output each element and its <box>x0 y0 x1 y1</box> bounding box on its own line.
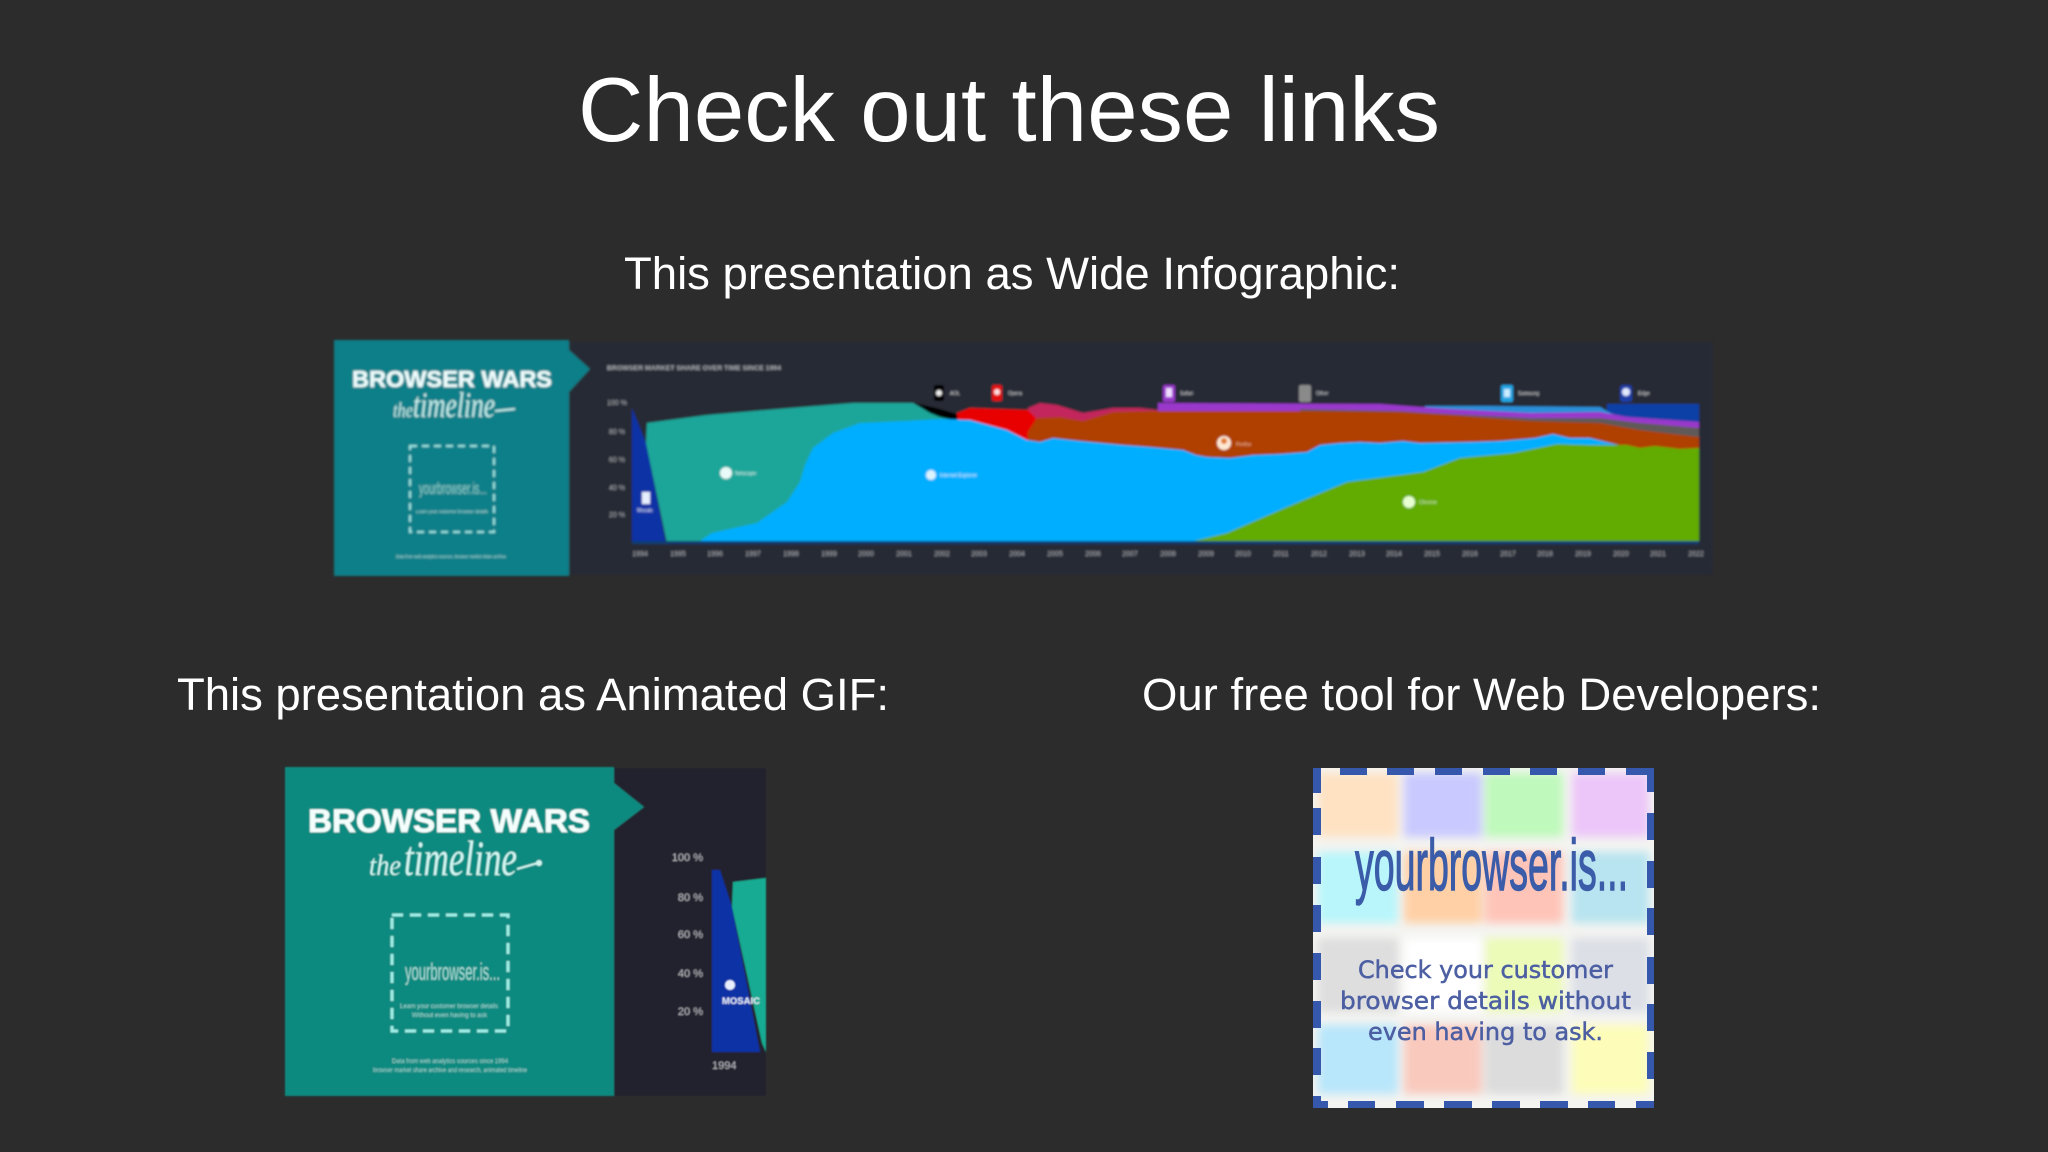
marker: chrome: Chrome <box>1419 500 1437 506</box>
area: internet explorer <box>697 419 1627 543</box>
wide x axis labels <box>632 551 1704 558</box>
area: opera red <box>957 408 1036 543</box>
wide chart heading: BROWSER MARKET SHARE OVER TIME SINCE 1994 <box>607 365 781 372</box>
area: mosaic <box>632 408 666 543</box>
gif title: BROWSER WARS <box>308 803 590 839</box>
wide x axis labels: 2009 <box>1198 551 1214 558</box>
wide dashed promo box <box>410 446 494 532</box>
wide footer note: Data from web analytics sources, browser market share archive <box>396 554 506 559</box>
area: chrome <box>1186 444 1699 543</box>
gif footer note: Data from web analytics sources since 1994 <box>392 1059 509 1065</box>
wide subtitle: the <box>393 398 413 422</box>
gif chart background <box>614 768 766 1096</box>
gif y axis labels: 20 % <box>678 1006 703 1018</box>
wide x axis labels: 2004 <box>1009 551 1025 558</box>
tool description: browser details without <box>1340 987 1631 1015</box>
wide x axis labels: 2017 <box>1500 551 1516 558</box>
wide x axis labels: 2002 <box>934 551 950 558</box>
title: Check out these links <box>578 60 1440 161</box>
wide y axis labels: 80 % <box>609 429 625 436</box>
wide x axis labels: 2013 <box>1349 551 1365 558</box>
chart background <box>569 342 1713 575</box>
gif subtitle: timeline <box>404 830 517 886</box>
marker: samsung <box>1501 385 1539 402</box>
gif y axis labels: 100 % <box>672 852 703 864</box>
wide x axis labels: 2008 <box>1160 551 1176 558</box>
marker: samsung: Samsung <box>1518 391 1539 397</box>
wide x axis labels: 1995 <box>670 551 686 558</box>
wide x axis labels: 2021 <box>1650 551 1666 558</box>
chart baseline <box>632 541 1699 544</box>
area: safari <box>1158 403 1699 543</box>
marker: edge: Edge <box>1638 391 1650 397</box>
marker: firefox: Firefox <box>1236 442 1252 448</box>
wide x axis labels: 2010 <box>1235 551 1251 558</box>
marker: internet explorer: Internet Explorer <box>940 473 977 479</box>
gif teal title panel <box>285 767 644 1096</box>
wide x axis labels: 2007 <box>1122 551 1138 558</box>
gif x axis label: 1994 <box>712 1060 736 1072</box>
marker: aol <box>934 385 960 401</box>
wide stacked area chart <box>632 403 1699 544</box>
gif promo logo: yourbrowser.is... <box>405 959 500 986</box>
tool description <box>1340 956 1631 1046</box>
gif promo caption: Learn your customer browser details <box>400 1004 498 1010</box>
wide x axis labels: 2000 <box>858 551 874 558</box>
dashed blue border <box>1313 768 1654 1108</box>
panel: animated GIF thumbnail <box>285 767 766 1096</box>
wide y axis labels: 100 % <box>607 400 627 407</box>
marker: firefox <box>1217 436 1252 450</box>
marker: opera <box>992 385 1022 401</box>
wide x axis labels: 1997 <box>745 551 761 558</box>
gif mosaic label: MOSAIC <box>722 996 760 1007</box>
marker: aol: AOL <box>950 391 960 397</box>
wide x axis labels: 2003 <box>971 551 987 558</box>
gif footer note: browser market share archive and research, animated timeline <box>373 1068 528 1074</box>
wide y axis labels <box>607 400 627 519</box>
marker: mosaic <box>637 492 653 514</box>
marker: mosaic: Mosaic <box>637 508 653 514</box>
area: samsung <box>1425 406 1616 543</box>
marker: netscape: Netscape <box>735 471 756 477</box>
marker: other: Other <box>1316 391 1329 397</box>
tool logo: yourbrowser.is... <box>1355 826 1628 906</box>
area: firefox <box>1028 411 1699 543</box>
marker: chrome <box>1403 496 1437 508</box>
wide x axis labels: 2005 <box>1047 551 1063 558</box>
gif promo caption: Without even having to ask <box>412 1013 488 1019</box>
area: edge <box>1607 404 1699 543</box>
marker: edge <box>1620 385 1650 402</box>
tool description: even having to ask. <box>1368 1018 1603 1046</box>
pastel tile grid <box>1318 773 1649 1094</box>
gif dashed promo box <box>392 915 508 1031</box>
wide x axis labels: 2006 <box>1085 551 1101 558</box>
panel: wide infographic thumbnail <box>334 340 1713 576</box>
gif y axis labels: 60 % <box>678 929 703 941</box>
gif icon: mosaic <box>725 980 735 990</box>
wide x axis labels: 2020 <box>1613 551 1629 558</box>
teal title panel <box>334 340 590 576</box>
tool description: Check your customer <box>1358 956 1613 984</box>
wide y axis labels: 20 % <box>609 512 625 519</box>
area: aol <box>915 403 958 421</box>
wide x axis labels: 2018 <box>1537 551 1553 558</box>
gif promo caption <box>400 1004 498 1019</box>
wide x axis labels: 2011 <box>1273 551 1289 558</box>
gif y axis labels <box>672 852 703 1018</box>
heading: animated GIF: This presentation as Animated GIF: <box>177 669 889 720</box>
gif y axis labels: 40 % <box>678 968 703 980</box>
wide x axis labels: 2012 <box>1311 551 1327 558</box>
wide x axis labels: 1998 <box>783 551 799 558</box>
wide browser markers <box>637 385 1650 514</box>
tool background <box>1313 768 1654 1108</box>
marker: safari: Safari <box>1180 391 1193 397</box>
wide x axis labels: 1999 <box>821 551 837 558</box>
wide subtitle: timeline <box>413 385 495 425</box>
panel: yourbrowser.is tool thumbnail <box>1313 768 1654 1108</box>
gif footer note <box>373 1059 528 1074</box>
wide x axis labels: 2015 <box>1424 551 1440 558</box>
heading: wide infographic: This presentation as Wide Infographic: <box>624 248 1400 299</box>
marker: netscape <box>720 467 756 479</box>
wide x axis labels: 2001 <box>896 551 912 558</box>
wide y axis labels: 60 % <box>609 457 625 464</box>
wide x axis labels: 2022 <box>1688 551 1704 558</box>
wide x axis labels: 2019 <box>1575 551 1591 558</box>
wide x axis labels: 1994 <box>632 551 648 558</box>
wide x axis labels: 2014 <box>1386 551 1402 558</box>
wide promo caption: Learn your customer browser details <box>416 509 489 514</box>
area: other <box>1300 409 1699 543</box>
gif area: mosaic <box>712 870 760 1052</box>
wide title: BROWSER WARS <box>352 366 552 392</box>
gif y axis labels: 80 % <box>678 892 703 904</box>
area: netscape <box>646 403 953 543</box>
wide x axis labels: 1996 <box>707 551 723 558</box>
marker: internet explorer <box>926 470 977 480</box>
wide x axis labels: 2016 <box>1462 551 1478 558</box>
wide promo logo: yourbrowser.is... <box>419 479 487 498</box>
gif area: netscape <box>732 878 766 1052</box>
marker: other <box>1299 385 1329 402</box>
gif subtitle: the <box>369 849 401 882</box>
marker: opera: Opera <box>1008 391 1022 397</box>
area: opera pink <box>1028 403 1158 543</box>
heading: free tool: Our free tool for Web Developers: <box>1142 669 1821 720</box>
marker: safari <box>1163 385 1193 402</box>
wide y axis labels: 40 % <box>609 485 625 492</box>
